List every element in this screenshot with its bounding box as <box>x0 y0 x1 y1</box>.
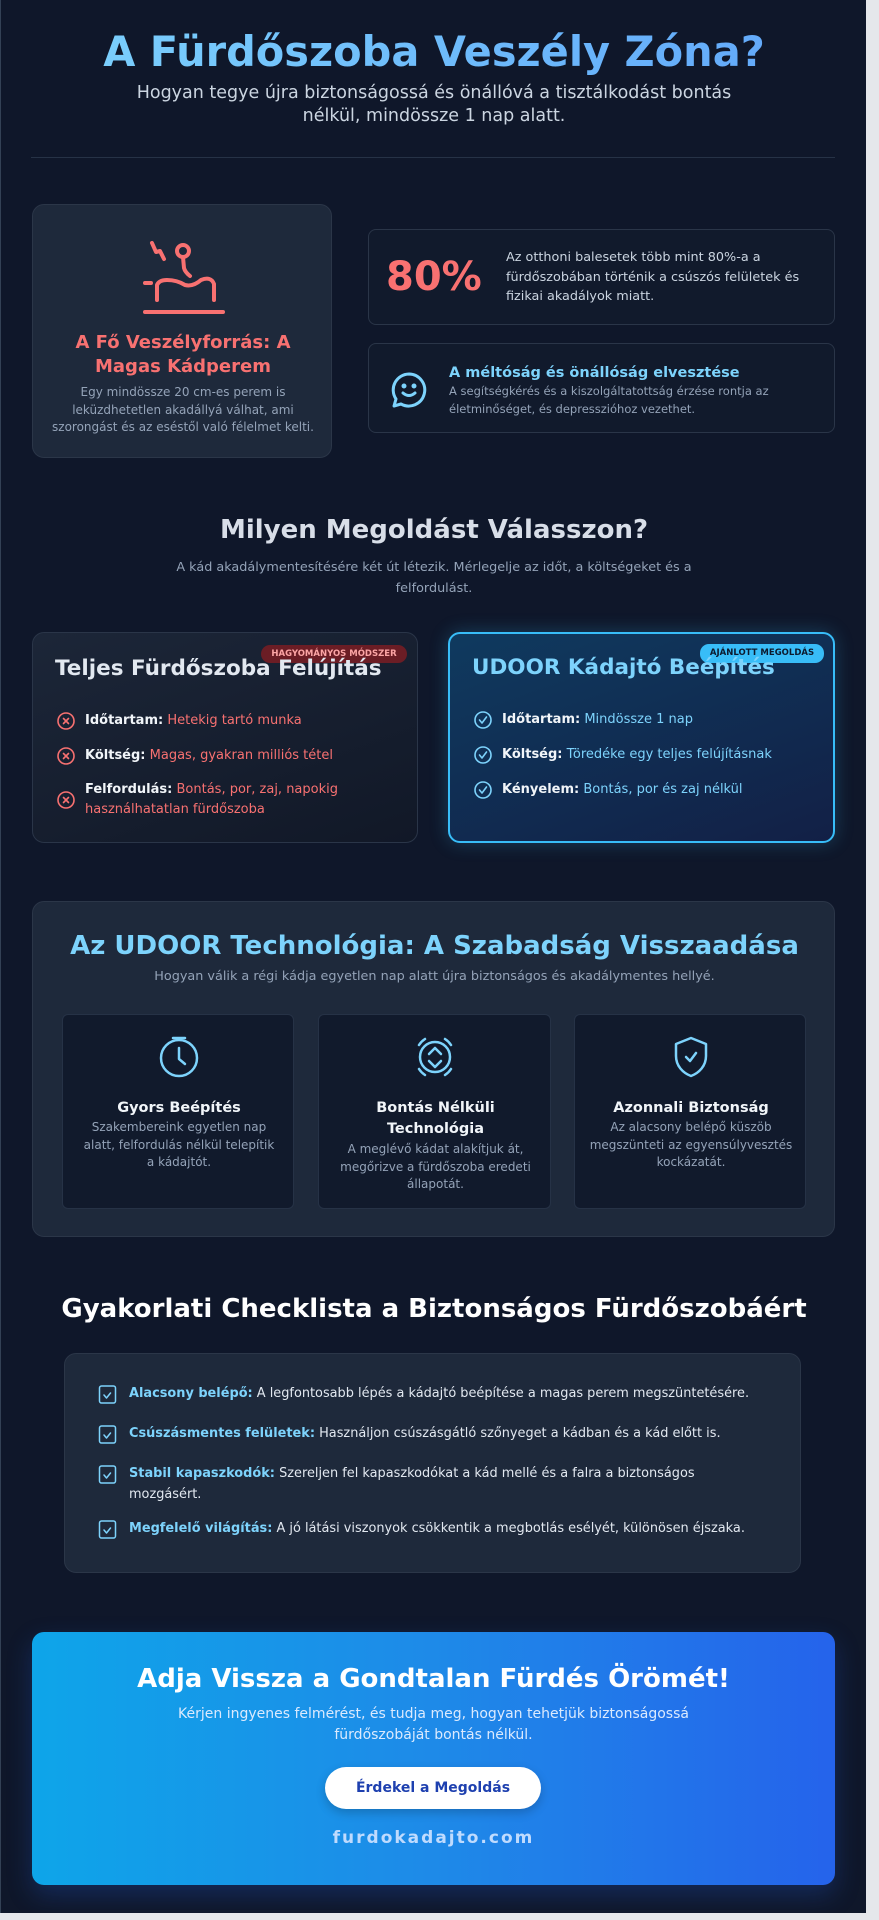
stat number: 80% <box>386 254 482 300</box>
panel: technology <box>32 901 835 1237</box>
text: Egy mindössze 20 cm-es perem is leküzdhetetlen akadállyá válhat, ami szorongást és az eséstől való félelmet kelti. <box>52 385 314 434</box>
cta heading: Adja Vissza a Gondtalan Fürdés Örömét! <box>137 1664 730 1694</box>
subtitle: Hogyan tegye újra biztonságossá és önállóvá a tisztálkodást bontás nélkül, mindössze 1 nap alatt. <box>137 83 731 126</box>
feature: no demolition: A meglévő kádat alakítjuk át, megőrizve a fürdőszoba eredeti állapotát. <box>340 1142 531 1191</box>
item: grab bars: Stabil kapaszkodók: Szereljen fel kapaszkodókat a kád mellé és a falra a biztonságos mozgásért. <box>129 1466 695 1502</box>
title: A Fürdőszoba Veszély Zóna? <box>103 27 765 76</box>
feature: fast install: Szakembereink egyetlen nap alatt, felfordulás nélkül telepítik a kádajtót. <box>84 1120 274 1169</box>
icon: convert <box>418 1038 452 1076</box>
icon: bathtub hazard <box>143 240 225 314</box>
badge: HAGYOMÁNYOS MÓDSZER <box>271 649 397 659</box>
badge: AJÁNLOTT MEGOLDÁS <box>710 648 814 658</box>
cta text: Kérjen ingyenes felmérést, és tudja meg, hogyan tehetjük biztonságossá fürdőszobáját bontás nélkül. <box>178 1706 689 1742</box>
feature: no demolition <box>318 1014 551 1209</box>
list: cons <box>57 712 338 817</box>
text: A segítségkérés és a kiszolgáltatottság érzése rontja az életminőséget, és depresszióhoz vezethet. <box>449 384 769 416</box>
item: disruption: Felfordulás: Bontás, por, zaj, napokig használhatatlan fürdőszoba <box>85 782 338 817</box>
heading: A méltóság és önállóság elvesztése <box>449 365 740 381</box>
item: comfort: Kényelem: Bontás, por és zaj nélkül <box>502 782 743 797</box>
website url: furdokadajto.com <box>333 1828 534 1848</box>
feature: instant safety: Az alacsony belépő küszöb megszünteti az egyensúlyvesztés kockázatát. <box>590 1120 792 1169</box>
card title: UDOOR Kádajtó Beépítés <box>472 655 775 680</box>
badge <box>261 645 407 663</box>
button <box>325 1767 541 1809</box>
heading: A Fő Veszélyforrás: A Magas Kádperem <box>75 332 291 377</box>
panel: traditional renovation <box>32 632 418 843</box>
panel: call to action <box>32 1632 835 1885</box>
card title: Teljes Fürdőszoba Felújítás <box>55 656 382 681</box>
subtext: A kád akadálymentesítésére két út létezik. Mérlegelje az időt, a költségeket és a felfordulást. <box>176 560 692 596</box>
feature: fast install: Gyors Beépítés <box>117 1100 241 1116</box>
item: non-slip: Csúszásmentes felületek: Használjon csúszásgátló szőnyeget a kádban és a kád előtt is. <box>129 1426 721 1441</box>
heading: choose solution: Milyen Megoldást Válasszon? <box>220 515 648 545</box>
item: cost: Költség: Magas, gyakran milliós tétel <box>85 748 333 763</box>
item: lighting: Megfelelő világítás: A jó látási viszonyok csökkentik a megbotlás esélyét, különösen éjszaka. <box>129 1521 745 1536</box>
icon: chat face <box>392 372 426 408</box>
title <box>1 25 867 79</box>
panel: dignity <box>368 343 835 433</box>
heading: checklist: Gyakorlati Checklista a Biztonságos Fürdőszobáért <box>61 1294 807 1324</box>
item: low entry: Alacsony belépő: A legfontosabb lépés a kádajtó beépítése a magas perem megszüntetésére. <box>129 1386 749 1401</box>
panel: 80% stat <box>368 229 835 325</box>
item: cost: Költség: Töredéke egy teljes felújításnak <box>502 747 772 762</box>
feature: no demolition: Bontás Nélküli Technológia <box>376 1100 495 1136</box>
panel: main hazard <box>32 204 332 458</box>
icon: clock <box>160 1036 198 1078</box>
icon: shield <box>674 1036 708 1078</box>
feature: fast install <box>62 1014 294 1209</box>
feature: instant safety <box>574 1014 806 1209</box>
item: duration: Időtartam: Mindössze 1 nap <box>502 712 693 727</box>
panel: checklist <box>64 1353 801 1573</box>
item: duration: Időtartam: Hetekig tartó munka <box>85 713 302 728</box>
badge <box>700 644 824 663</box>
subtext: Hogyan válik a régi kádja egyetlen nap alatt újra biztonságos és akadálymentes hellyé. <box>154 969 715 984</box>
heading: Az UDOOR Technológia: A Szabadság Visszaadása <box>70 931 799 961</box>
list: pros <box>474 711 772 799</box>
stat text: Az otthoni balesetek több mint 80%-a a fürdőszobában történik a csúszós felületek és fizikai akadályok miatt. <box>506 250 799 304</box>
button: Érdekel a Megoldás <box>356 1780 510 1796</box>
feature: instant safety: Azonnali Biztonság <box>613 1100 769 1116</box>
panel: UDOOR solution <box>448 632 835 843</box>
